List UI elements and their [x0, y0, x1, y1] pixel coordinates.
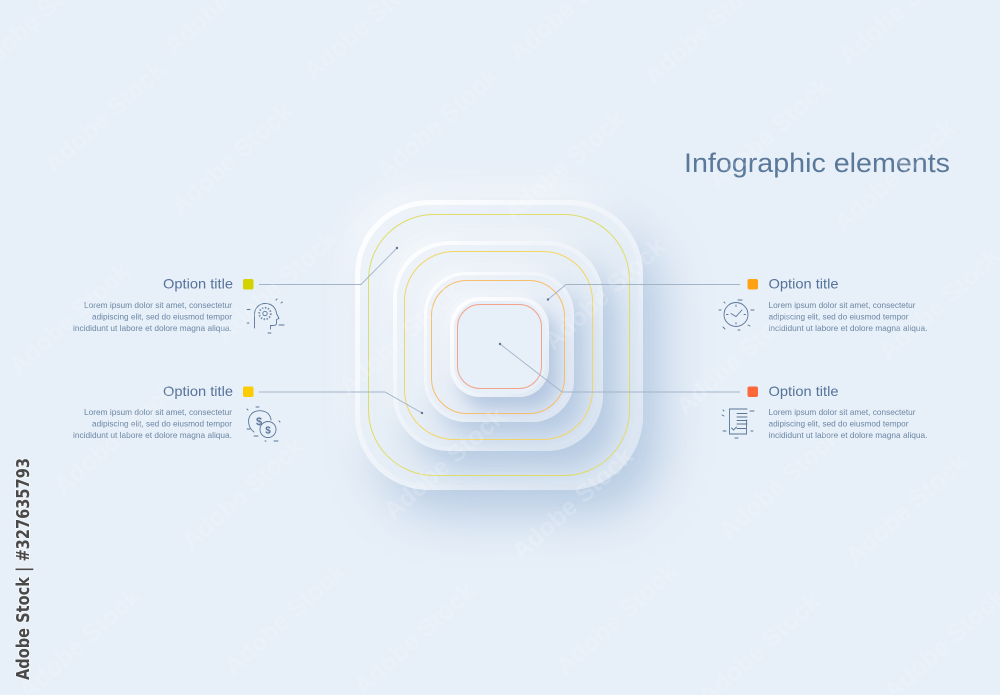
- watermark: repeated Adobe Stock: Adobe Stock: [551, 557, 683, 681]
- watermark: repeated Adobe Stock: Adobe Stock: [671, 297, 803, 421]
- watermark: repeated Adobe Stock: Adobe Stock: [499, 104, 631, 228]
- watermark: repeated Adobe Stock: Adobe Stock: [219, 557, 351, 681]
- outline: outer ring yellow-green: [368, 214, 630, 476]
- watermark: repeated Adobe Stock: Adobe Stock: [841, 447, 973, 571]
- square 2 outer: [393, 241, 603, 451]
- outline: second ring yellow: [404, 251, 593, 440]
- option block: bottom right: adipiscing elit, sed do eiusmod tempor: [768, 418, 909, 428]
- square 4 outer: [450, 297, 549, 397]
- outline: third ring orange: [431, 280, 565, 414]
- stock id label: Adobe Stock | #327635793: [13, 458, 34, 680]
- icon: dollar coins: $: [256, 416, 262, 428]
- panel: nested rounded squares: [355, 200, 683, 536]
- option block: top right: incididunt ut labore et dolore magna aliqua.: [768, 323, 928, 333]
- option block: top left: adipiscing elit, sed do eiusmod tempor: [92, 312, 232, 322]
- square 3 outer: [424, 272, 574, 422]
- watermark: repeated Adobe Stock: Adobe Stock: [829, 114, 961, 238]
- icon: dollar coins: $: [265, 426, 271, 436]
- watermark: repeated Adobe Stock: Adobe Stock: [507, 442, 639, 566]
- square 2 face: [397, 245, 599, 447]
- outline: inner ring coral: [457, 304, 542, 389]
- watermark: repeated Adobe Stock: Adobe Stock: [714, 422, 846, 546]
- square 1 outer: [355, 200, 643, 490]
- watermark: repeated Adobe Stock: Adobe Stock: [372, 62, 504, 186]
- watermark: repeated Adobe Stock: Adobe Stock: [49, 377, 181, 501]
- option block: top left: incididunt ut labore et dolore magna aliqua.: [73, 323, 232, 333]
- square 4 face: [454, 301, 545, 393]
- watermark: repeated Adobe Stock: Adobe Stock: [39, 55, 171, 179]
- option block: bottom right: Option title: [768, 383, 839, 399]
- watermark: repeated Adobe Stock: Adobe Stock: [4, 257, 136, 381]
- square 3 face: [427, 275, 571, 419]
- square 1 face: [360, 205, 638, 485]
- option block: top left: Lorem ipsum dolor sit amet, consectetur: [84, 300, 232, 310]
- option block: top right: Option title: [768, 276, 839, 292]
- title: Infographic elements: [684, 148, 950, 178]
- watermark: repeated Adobe Stock: Adobe Stock: [166, 97, 298, 221]
- option block: bottom left: adipiscing elit, sed do eiusmod tempor: [92, 418, 232, 428]
- option block: bottom left: incididunt ut labore et dolore magna aliqua.: [73, 430, 232, 440]
- watermark: repeated Adobe Stock: Adobe Stock: [211, 224, 343, 348]
- watermark: repeated Adobe Stock: Adobe Stock: [539, 232, 671, 356]
- watermark: repeated Adobe Stock: Adobe Stock: [177, 432, 309, 556]
- option block: bottom right: Lorem ipsum dolor sit amet, consectetur: [768, 407, 916, 417]
- option block: bottom right: incididunt ut labore et dolore magna aliqua.: [768, 430, 928, 440]
- option block: bottom left: Option title: [163, 383, 233, 399]
- option block: top right: Lorem ipsum dolor sit amet, consectetur: [768, 300, 916, 310]
- option block: bottom left: Lorem ipsum dolor sit amet, consectetur: [84, 407, 232, 417]
- watermark: repeated Adobe Stock: Adobe Stock: [704, 72, 836, 196]
- watermark: repeated Adobe Stock: Adobe Stock: [379, 402, 511, 526]
- watermark: repeated Adobe Stock: Adobe Stock: [334, 277, 466, 401]
- option block: top left: Option title: [163, 276, 233, 292]
- option block: top right: adipiscing elit, sed do eiusmod tempor: [768, 312, 909, 322]
